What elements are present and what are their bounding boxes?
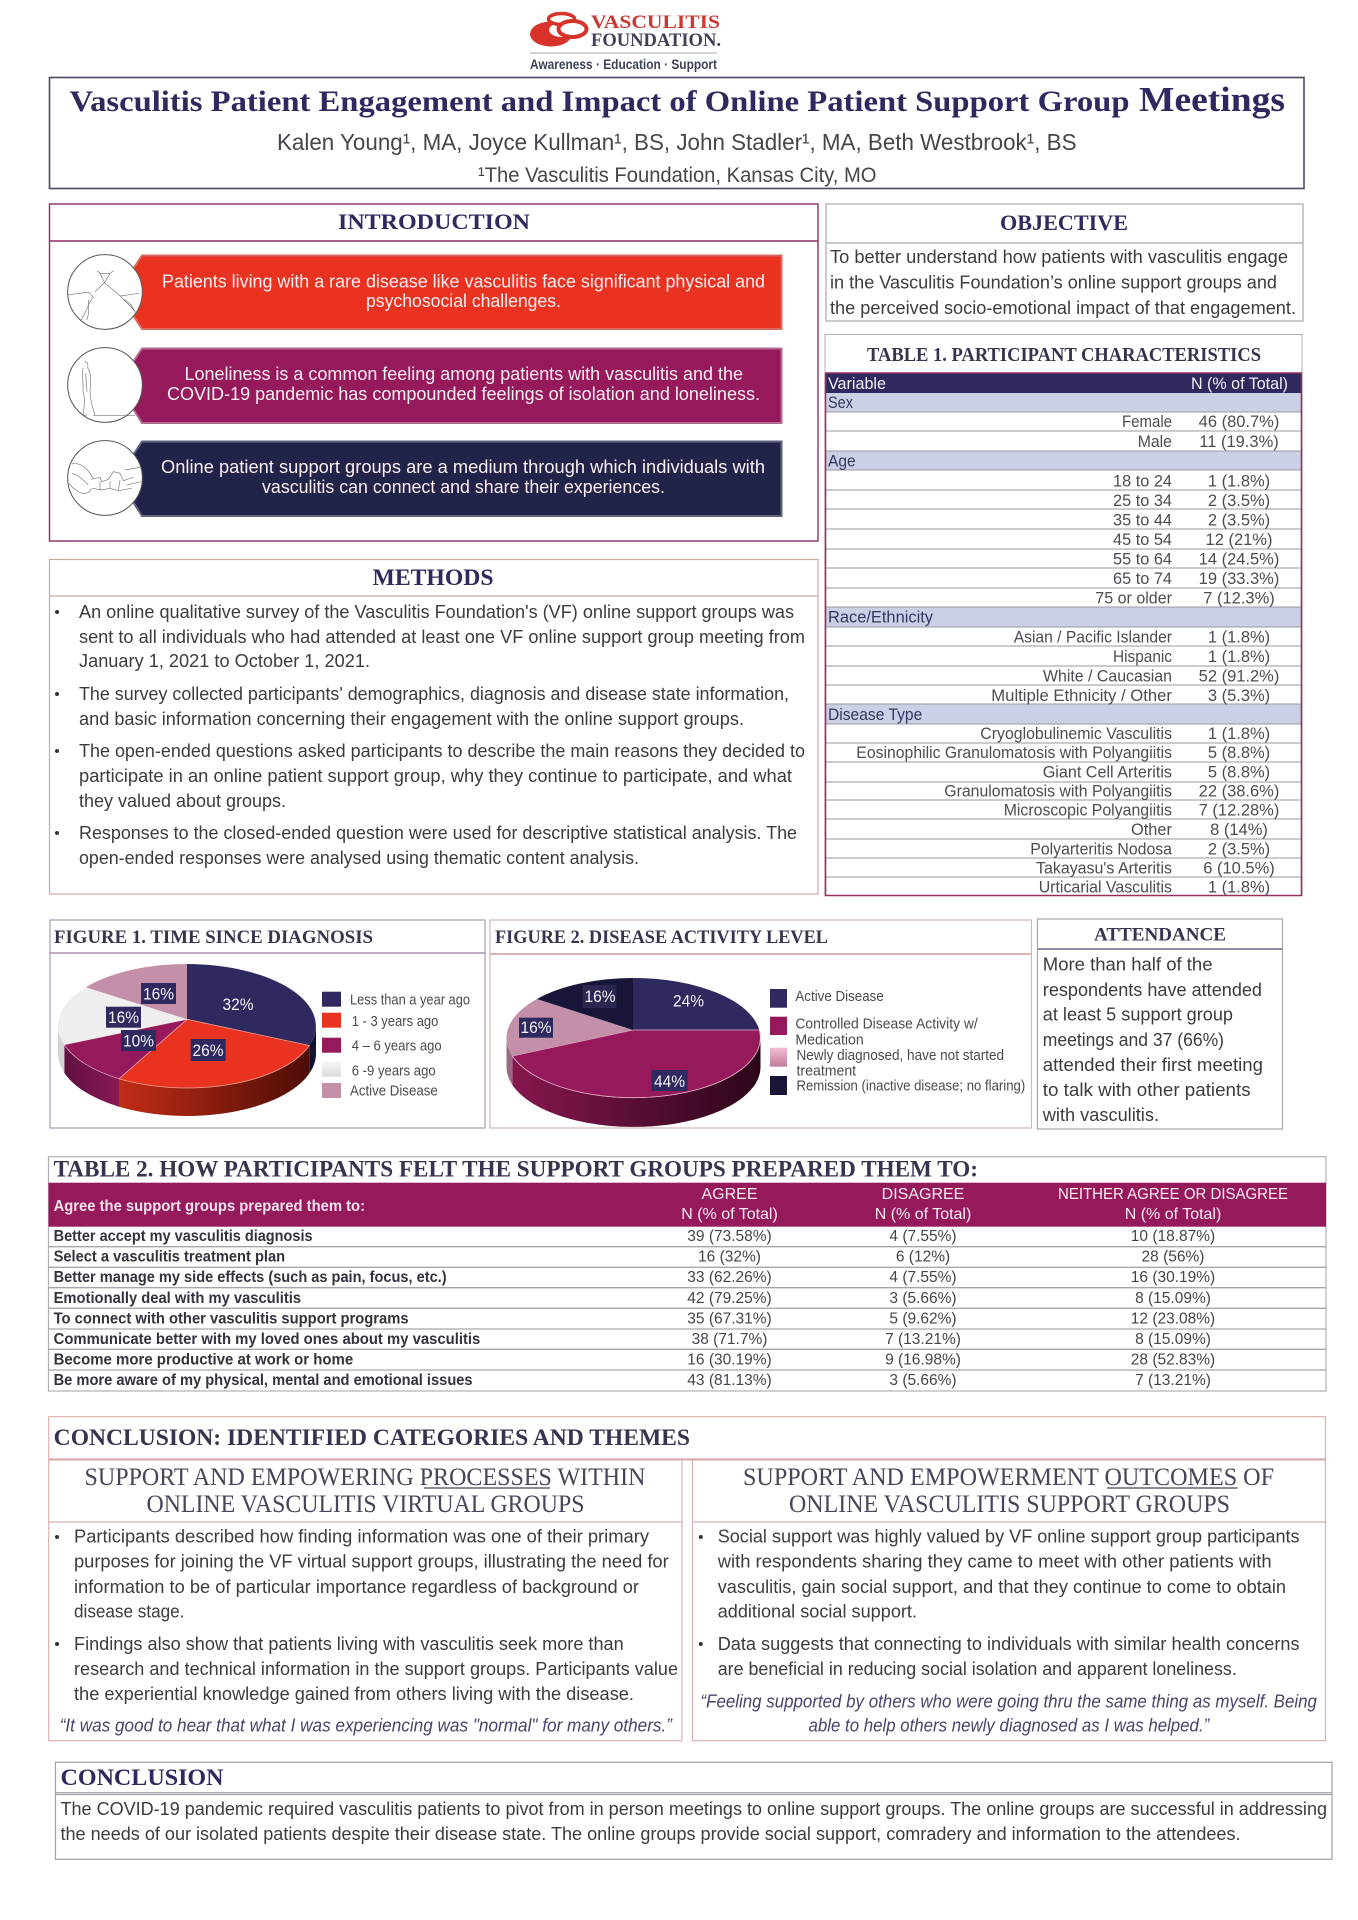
table rows: disease type: 1 (1.8%) <box>1208 879 1270 897</box>
banner: loneliness: COVID-19 pandemic has compounded feelings of isolation and loneliness. <box>167 383 760 404</box>
text: attendance body: More than half of the <box>1043 954 1212 975</box>
title: Vasculitis Patient Engagement and Impact of Online Patient Support Group <box>70 85 1130 118</box>
subheading: outcomes: SUPPORT AND EMPOWERMENT OUTCOMES OF <box>743 1464 1274 1491</box>
table rows: race and ethnicity <box>828 608 1279 705</box>
text: outcomes bullets: are beneficial in reducing social isolation and apparent loneliness. <box>718 1658 1237 1679</box>
text: outcomes bullets: with respondents sharing they came to meet with other patients with <box>717 1551 1272 1572</box>
legend: figure 1 <box>322 992 470 1100</box>
table values: 33 (62.26%) <box>687 1269 772 1286</box>
table row labels <box>54 1228 480 1389</box>
heading: table 2: TABLE 2. HOW PARTICIPANTS FELT THE SUPPORT GROUPS PREPARED THEM TO: <box>54 1157 978 1182</box>
table values: 39 (73.58%) <box>687 1228 772 1245</box>
table rows: disease type: 2 (3.5%) <box>1208 840 1270 858</box>
subheading: processes: ONLINE VASCULITIS VIRTUAL GROUPS <box>146 1491 584 1518</box>
text: attendance body: to talk with other patients <box>1043 1079 1251 1100</box>
quote: processes: “It was good to hear that what I was experiencing was "normal" for many others.” <box>60 1716 673 1736</box>
text: processes bullets: disease stage. <box>74 1601 184 1622</box>
text: outcomes bullets: additional social support. <box>718 1601 917 1622</box>
text: attendance body: attended their first meeting <box>1043 1054 1263 1075</box>
label: 26%: 26% <box>192 1042 224 1060</box>
text: methods bullet 4: open-ended responses were analysed using thematic content analysis. <box>79 847 639 868</box>
table values: 43 (81.13%) <box>687 1372 772 1389</box>
logo: Vasculitis Foundation <box>530 12 721 72</box>
table values: 7 (13.21%) <box>1135 1372 1211 1389</box>
label: 44%: 44% <box>654 1073 685 1091</box>
label: 32%: 32% <box>222 996 254 1014</box>
text: methods bullet 4: Responses to the closed-ended question were used for descriptive statistical analysis. The <box>79 822 797 843</box>
text: outcomes bullets: Social support was highly valued by VF online support group participants <box>718 1526 1300 1547</box>
table rows: age: 35 to 44 <box>1113 512 1172 530</box>
table rows: age <box>828 452 1279 608</box>
table rows: disease type: Other <box>1131 821 1172 839</box>
table rows: disease type: Giant Cell Arteritis <box>1043 764 1172 782</box>
label: 16% dark slice: 16% <box>584 988 616 1006</box>
text: conclusion body: The COVID-19 pandemic required vasculitis patients to pivot from in person meetings to online support groups. The online groups are successful in addressing <box>60 1798 1327 1819</box>
icon: logo rings <box>530 14 586 46</box>
table values: 8 (15.09%) <box>1135 1290 1211 1307</box>
table rows: sex: Female <box>1122 413 1172 431</box>
table rows: disease type: Disease Type <box>828 706 922 724</box>
heading: conclusion: CONCLUSION <box>60 1765 224 1790</box>
table rows: disease type: 22 (38.6%) <box>1199 782 1279 800</box>
table rows: sex: 11 (19.3%) <box>1199 433 1279 451</box>
heading: objective: OBJECTIVE <box>1000 210 1128 235</box>
table rows: race and ethnicity: Asian / Pacific Islander <box>1014 628 1172 646</box>
panel: processes column <box>49 1460 682 1741</box>
affiliation: ¹The Vasculitis Foundation, Kansas City, MO <box>478 164 876 187</box>
table rows: disease type: Urticarial Vasculitis <box>1039 879 1172 897</box>
text: attendance body: with vasculitis. <box>1042 1104 1159 1125</box>
panel: figure 2 disease activity level <box>490 920 1032 1128</box>
title: last word: Meetings <box>1139 80 1285 119</box>
logo: Vasculitis Foundation: FOUNDATION. <box>591 30 721 51</box>
table row labels: Select a vasculitis treatment plan <box>54 1249 285 1266</box>
panel: figure 1 time since diagnosis <box>50 920 485 1128</box>
text: processes bullets: information to be of particular importance regardless of background or <box>74 1576 639 1597</box>
table values: 3 (5.66%) <box>889 1372 957 1389</box>
table rows: race and ethnicity: Hispanic <box>1113 648 1172 666</box>
text: processes bullets <box>55 1526 678 1704</box>
pie chart: time since diagnosis <box>58 964 316 1116</box>
label: 16% grey slice: 16% <box>108 1009 139 1027</box>
table values: 16 (32%) <box>698 1249 761 1266</box>
table rows: disease type: 8 (14%) <box>1210 821 1268 839</box>
banner: challenges: psychosocial challenges. <box>366 290 561 311</box>
panel: methods <box>50 560 818 894</box>
table values: 42 (79.25%) <box>687 1290 772 1307</box>
table rows: disease type: Polyarteritis Nodosa <box>1030 840 1173 858</box>
text: processes bullets: research and technical information in the support groups. Participants value <box>74 1658 678 1679</box>
table row labels: Better accept my vasculitis diagnosis <box>54 1228 313 1245</box>
table rows: disease type: 5 (8.8%) <box>1208 744 1270 762</box>
table values: 38 (71.7%) <box>692 1331 767 1348</box>
table rows: race and ethnicity: 3 (5.3%) <box>1208 687 1270 705</box>
text: methods bullet 1: January 1, 2021 to October 1, 2021. <box>79 650 370 671</box>
table rows: sex: Sex <box>828 394 854 412</box>
text: attendance body <box>1042 954 1263 1125</box>
panel: outcomes column <box>692 1460 1326 1741</box>
text: conclusion body: the needs of our isolated patients despite their disease state. The online groups provide social support, comradery and information to the attendees. <box>60 1823 1240 1844</box>
subheading: outcomes: ONLINE VASCULITIS SUPPORT GROUPS <box>789 1491 1230 1518</box>
text: methods bullet 1 <box>55 601 805 671</box>
table values: 7 (13.21%) <box>885 1331 961 1348</box>
table header: N (% of Total) <box>681 1206 778 1223</box>
pie chart: disease activity <box>506 978 760 1127</box>
banner: online groups <box>118 442 782 516</box>
table rows: disease type <box>828 706 1279 897</box>
text: objective body: To better understand how patients with vasculitis engage <box>830 246 1288 267</box>
legend: figure 1: Active Disease <box>350 1084 438 1100</box>
table rows: age: 65 to 74 <box>1113 570 1172 588</box>
panel: table 1 participant characteristics <box>825 334 1302 897</box>
table values: 4 (7.55%) <box>889 1269 957 1286</box>
icon: lone walking figure <box>68 348 142 422</box>
table rows: disease type: 1 (1.8%) <box>1208 725 1270 743</box>
text: processes bullets: Participants described how finding information was one of their primary <box>74 1526 650 1547</box>
text: methods bullet 2: The survey collected participants' demographics, diagnosis and disease state information, <box>79 683 789 704</box>
heading: figure 2: FIGURE 2. DISEASE ACTIVITY LEVEL <box>495 927 828 948</box>
table values: 4 (7.55%) <box>889 1228 957 1245</box>
text: objective body: in the Vasculitis Foundation’s online support groups and <box>830 272 1277 292</box>
text: processes bullets: Findings also show that patients living with vasculitis seek more than <box>74 1633 624 1654</box>
table rows: disease type: 7 (12.28%) <box>1199 802 1279 820</box>
table row labels: Communicate better with my loved ones about my vasculitis <box>54 1331 480 1348</box>
table header: DISAGREE <box>882 1186 964 1203</box>
panel: table 2 support group preparation <box>48 1157 1326 1391</box>
table rows: age: 19 (33.3%) <box>1199 570 1279 588</box>
table header: N (% of Total) <box>875 1206 971 1223</box>
table rows: age: 14 (24.5%) <box>1199 550 1279 568</box>
text: methods bullet 2 <box>55 683 789 729</box>
logo: Vasculitis Foundation: VASCULITIS <box>591 12 720 33</box>
table rows: age: 1 (1.8%) <box>1208 472 1270 490</box>
table rows: disease type: Microscopic Polyangiitis <box>1004 802 1172 820</box>
legend: figure 2: treatment <box>796 1064 856 1080</box>
legend: figure 2: Remission (inactive disease; no flaring) <box>796 1079 1025 1095</box>
panel: introduction <box>50 204 818 541</box>
table values: 6 (12%) <box>896 1249 950 1266</box>
table rows: age: 25 to 34 <box>1113 492 1172 510</box>
table rows: sex <box>828 394 1279 451</box>
panel: title block <box>50 78 1304 188</box>
subheading: outcomes <box>743 1464 1274 1518</box>
text: outcomes bullets: vasculitis, gain social support, and that they continue to come to obtain <box>718 1576 1286 1597</box>
text: attendance body: respondents have attended <box>1043 979 1262 1000</box>
table rows: race and ethnicity: Race/Ethnicity <box>828 608 934 626</box>
table values: 28 (52.83%) <box>1131 1352 1215 1369</box>
legend: figure 1: 6 -9 years ago <box>352 1064 436 1080</box>
table row labels: Become more productive at work or home <box>54 1352 354 1369</box>
table values: 35 (67.31%) <box>687 1310 772 1327</box>
panel: conclusion <box>56 1762 1332 1859</box>
subheading: processes: SUPPORT AND EMPOWERING PROCESSES WITHIN <box>84 1464 646 1491</box>
table rows: age: Age <box>828 452 856 470</box>
table rows: disease type: Eosinophilic Granulomatosis with Polyangiitis <box>856 744 1172 762</box>
table row labels: Better manage my side effects (such as pain, focus, etc.) <box>54 1269 447 1286</box>
label: 24%: 24% <box>673 992 704 1010</box>
table rows: sex: 46 (80.7%) <box>1199 413 1279 431</box>
legend: figure 1: Less than a year ago <box>350 992 470 1008</box>
banner: challenges <box>118 256 782 329</box>
label: 16% pink slice: 16% <box>520 1019 552 1037</box>
label: 10%: 10% <box>123 1032 154 1050</box>
text: methods bullet 3: they valued about groups. <box>79 790 286 811</box>
table header: AGREE <box>701 1186 758 1203</box>
legend: figure 1: 4 – 6 years ago <box>352 1039 442 1055</box>
table rows: age: 2 (3.5%) <box>1208 492 1270 510</box>
text: objective body <box>830 246 1296 318</box>
text: outcomes bullets <box>699 1526 1300 1679</box>
panel: attendance <box>1038 919 1282 1129</box>
table rows: age: 45 to 54 <box>1113 531 1172 549</box>
table header: Variable <box>828 375 886 393</box>
table values: 12 (23.08%) <box>1131 1310 1215 1327</box>
text: processes bullets: purposes for joining the VF virtual support groups, illustrating the need for <box>74 1551 669 1572</box>
icon: mountain figure <box>68 255 142 329</box>
legend: figure 2 <box>770 989 1025 1095</box>
table rows: age: 18 to 24 <box>1113 472 1172 490</box>
text: attendance body: meetings and 37 (66%) <box>1043 1029 1224 1050</box>
table values: 28 (56%) <box>1142 1249 1204 1266</box>
text: methods bullet 3: participate in an online patient support group, why they continue to participate, and what <box>79 765 792 786</box>
table header: Agree the support groups prepared them to: <box>54 1198 365 1215</box>
table header: N (% of Total) <box>1125 1206 1221 1223</box>
banner: challenges: Patients living with a rare disease like vasculitis face significant physical and <box>162 270 765 292</box>
table rows: race and ethnicity: 1 (1.8%) <box>1208 648 1270 666</box>
table rows: disease type: Takayasu's Arteritis <box>1036 860 1172 878</box>
table rows: disease type: Granulomatosis with Polyangiitis <box>944 782 1172 800</box>
table rows: race and ethnicity: Multiple Ethnicity / Other <box>991 687 1172 705</box>
label: 16% pink slice: 16% <box>143 986 174 1004</box>
icon: hands with puzzle <box>68 441 142 515</box>
subheading: processes <box>84 1464 646 1518</box>
text: outcomes bullets: Data suggests that connecting to individuals with similar health concerns <box>718 1633 1300 1654</box>
text: objective body: the perceived socio-emotional impact of that engagement. <box>830 297 1296 318</box>
table values: 10 (18.87%) <box>1131 1228 1215 1245</box>
table rows: age: 2 (3.5%) <box>1208 512 1270 530</box>
quote: outcomes: “Feeling supported by others who were going thru the same thing as myself. Being <box>700 1692 1317 1712</box>
quote: outcomes <box>700 1692 1317 1736</box>
banner: online groups: vasculitis can connect and share their experiences. <box>262 476 665 497</box>
table values: 9 (16.98%) <box>885 1352 961 1369</box>
legend: figure 2: Medication <box>795 1032 864 1048</box>
heading: categories and themes: CONCLUSION: IDENTIFIED CATEGORIES AND THEMES <box>54 1425 690 1450</box>
banner: online groups: Online patient support groups are a medium through which individuals with <box>161 456 765 477</box>
table rows: race and ethnicity: 1 (1.8%) <box>1208 628 1270 646</box>
table values: 16 (30.19%) <box>1131 1269 1215 1286</box>
panel: conclusion categories and themes <box>49 1417 1326 1741</box>
table values: 16 (30.19%) <box>687 1352 772 1369</box>
legend: figure 2: Active Disease <box>795 989 884 1005</box>
table row labels: Emotionally deal with my vasculitis <box>54 1290 301 1307</box>
table rows: age: 75 or older <box>1095 590 1172 608</box>
text: methods bullet 3: The open-ended questions asked participants to describe the main reasons they decided to <box>79 740 805 761</box>
table rows: disease type: 6 (10.5%) <box>1203 860 1275 878</box>
table section bands <box>825 393 1302 724</box>
heading: attendance: ATTENDANCE <box>1094 926 1226 946</box>
table rows: age: 55 to 64 <box>1113 550 1172 568</box>
table header <box>48 1183 1326 1227</box>
heading: table 1: TABLE 1. PARTICIPANT CHARACTERISTICS <box>867 345 1261 366</box>
authors: Kalen Young¹, MA, Joyce Kullman¹, BS, John Stadler¹, MA, Beth Westbrook¹, BS <box>277 129 1076 155</box>
table values: 3 (5.66%) <box>889 1290 957 1307</box>
legend: figure 2: Newly diagnosed, have not started <box>796 1048 1004 1064</box>
text: methods bullet 2: and basic information concerning their engagement with the online support groups. <box>79 708 744 729</box>
table rows: age: 12 (21%) <box>1206 531 1272 549</box>
text: methods bullet 1: An online qualitative survey of the Vasculitis Foundation's (VF) online support groups was <box>79 601 794 622</box>
text: attendance body: at least 5 support group <box>1043 1004 1233 1025</box>
banner: loneliness: Loneliness is a common feeling among patients with vasculitis and the <box>184 363 743 384</box>
table header: N (% of Total) <box>1191 375 1288 393</box>
logo: Vasculitis Foundation: Awareness · Education · Support <box>530 56 717 72</box>
table rows: race and ethnicity: 52 (91.2%) <box>1199 668 1279 686</box>
text: methods bullet 4 <box>55 822 797 868</box>
table rows: age: 7 (12.3%) <box>1203 590 1275 608</box>
table rows: disease type: 5 (8.8%) <box>1208 764 1270 782</box>
heading: figure 1: FIGURE 1. TIME SINCE DIAGNOSIS <box>54 927 373 948</box>
quote: outcomes: able to help others newly diagnosed as I was helped.” <box>808 1716 1210 1736</box>
text: processes bullets: the experiential knowledge gained from others living with the disease. <box>74 1683 634 1704</box>
legend: figure 1: 1 - 3 years ago <box>352 1014 438 1030</box>
text: conclusion body <box>60 1798 1327 1844</box>
table row labels: Be more aware of my physical, mental and emotional issues <box>54 1372 473 1389</box>
table rows: disease type: Cryoglobulinemic Vasculitis <box>980 725 1172 743</box>
table values <box>687 1228 1215 1389</box>
heading: introduction: INTRODUCTION <box>338 209 530 234</box>
text: methods bullet 1: sent to all individuals who had attended at least one VF online support group meeting from <box>79 626 805 647</box>
table rows: sex: Male <box>1138 433 1172 451</box>
table values: 8 (15.09%) <box>1135 1331 1211 1348</box>
text: methods bullet 3 <box>55 740 805 811</box>
table rows: race and ethnicity: White / Caucasian <box>1043 668 1172 686</box>
legend: figure 2: Controlled Disease Activity w/ <box>795 1016 979 1032</box>
table row labels: To connect with other vasculitis support programs <box>54 1310 409 1327</box>
banner: loneliness <box>118 348 782 423</box>
table values: 5 (9.62%) <box>889 1310 957 1327</box>
panel: objective <box>826 204 1303 321</box>
table header: NEITHER AGREE OR DISAGREE <box>1058 1186 1288 1203</box>
heading: methods: METHODS <box>372 565 494 590</box>
table header <box>825 373 1302 393</box>
